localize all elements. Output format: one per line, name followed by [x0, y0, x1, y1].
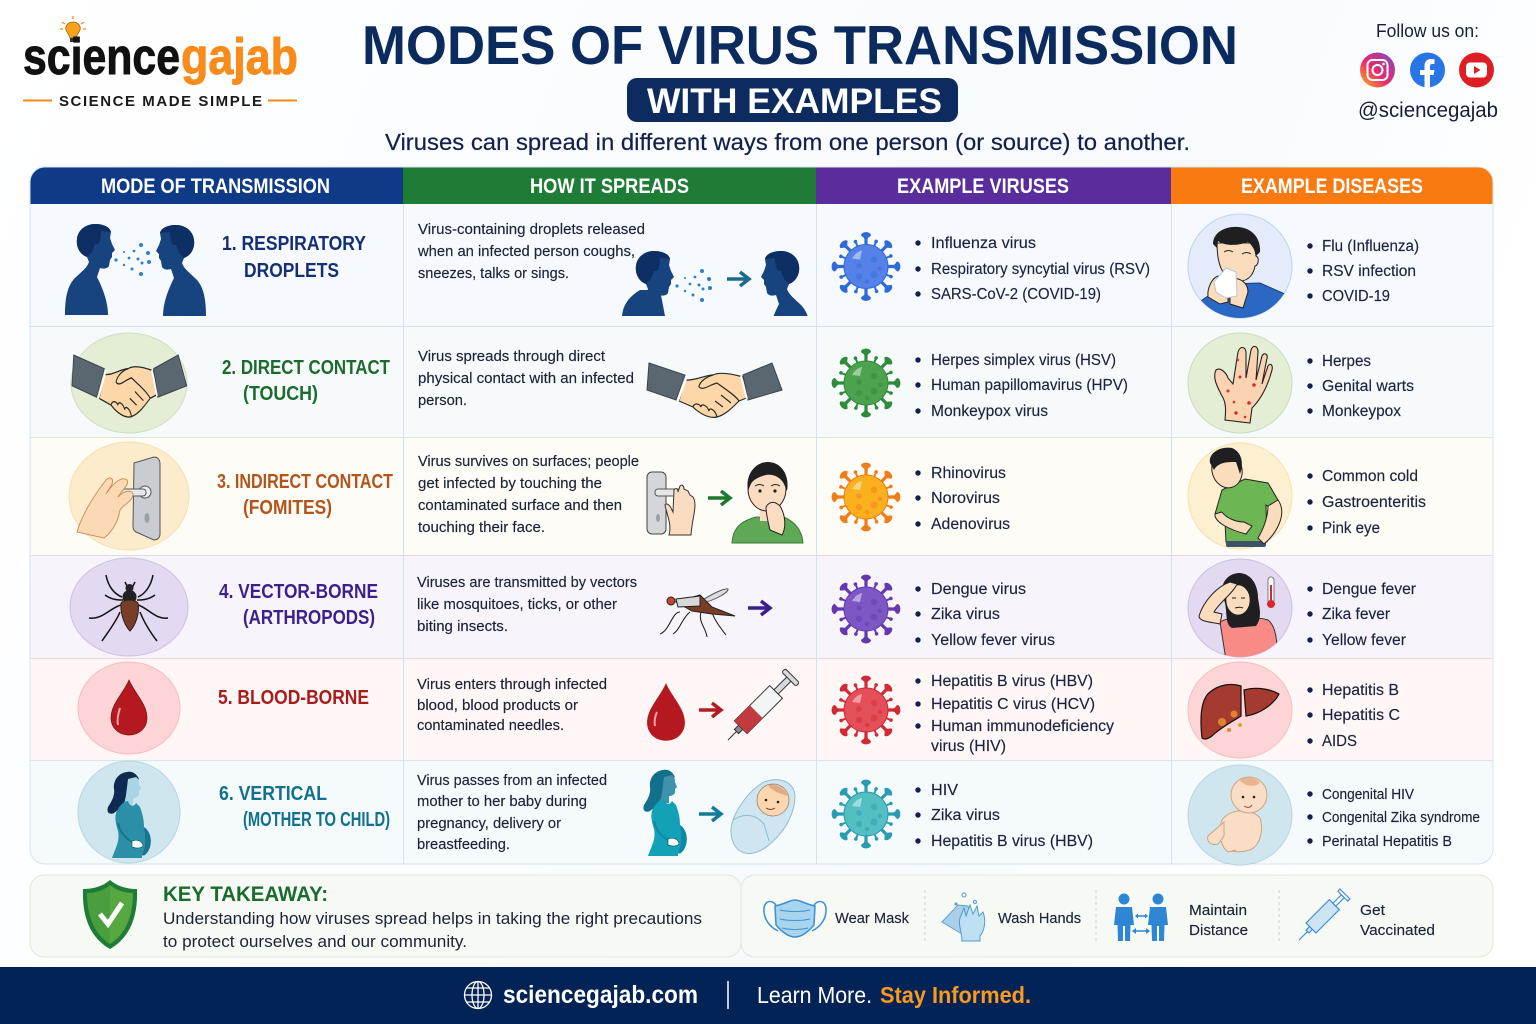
- list: blood-borne viruses: Hepatitis B virus (HBV): [931, 673, 1093, 690]
- label: vertical: 6. VERTICAL: [219, 783, 327, 805]
- list: blood-borne diseases: Hepatitis C: [1322, 707, 1400, 724]
- text: how droplets spread: sneezes, talks or sings.: [418, 266, 569, 282]
- heading: key takeaway: KEY TAKEAWAY:: [163, 883, 328, 906]
- text: how direct contact spreads: person.: [418, 393, 467, 409]
- list: fomite diseases: [1307, 468, 1426, 537]
- row 1: respiratory droplets: [64, 214, 1418, 318]
- subtitle pill: with examples: WITH EXAMPLES: [647, 82, 942, 121]
- column headers: [101, 175, 1423, 198]
- list: blood-borne viruses: virus (HIV): [931, 738, 1006, 755]
- icon: two people with droplets: [65, 224, 206, 316]
- icon: maintain distance: [1114, 894, 1168, 941]
- list: vertical diseases: Congenital HIV: [1322, 786, 1414, 803]
- list: vector viruses: Dengue virus: [931, 581, 1026, 598]
- row 2: direct contact: [71, 333, 1414, 433]
- social block: [1358, 21, 1498, 122]
- text: how blood spreads: Virus enters through infected: [417, 677, 607, 693]
- list: blood-borne diseases: [1307, 682, 1400, 750]
- icon: youtube: [1459, 52, 1494, 88]
- icon: facebook: [1410, 52, 1445, 88]
- list: vertical diseases: Perinatal Hepatitis B: [1322, 833, 1452, 850]
- footer bar: [0, 967, 1536, 1024]
- text: how blood spreads: contaminated needles.: [417, 718, 564, 734]
- icon: instagram: [1360, 52, 1395, 88]
- icon: vaccine syringe: [1294, 889, 1350, 945]
- label: vertical: (MOTHER TO CHILD): [243, 809, 390, 831]
- icon: handshake in circle: [71, 333, 187, 433]
- icon: green virus: [832, 349, 900, 417]
- icon: man sneezing: [1188, 214, 1292, 322]
- text: how vertical spread works: breastfeeding.: [417, 837, 510, 853]
- text: takeaway message: Understanding how viruses spread helps in taking the right precautions: [163, 909, 702, 928]
- label: vertical: [219, 783, 390, 831]
- text: how blood spreads: blood, blood products or: [417, 698, 578, 714]
- icon: teal virus: [832, 780, 900, 848]
- list: vector viruses: Zika virus: [931, 606, 1000, 623]
- icon: liver: [1188, 662, 1292, 758]
- list: direct contact viruses: Monkeypox virus: [931, 403, 1048, 420]
- icon: shield with check: [83, 880, 137, 949]
- label: indirect contact: (FOMITES): [243, 497, 332, 519]
- list: fomite viruses: [915, 465, 1010, 533]
- list: direct contact diseases: Genital warts: [1322, 378, 1414, 395]
- list: direct contact diseases: Herpes: [1322, 353, 1371, 370]
- text: how vertical spread works: pregnancy, delivery or: [417, 816, 561, 832]
- list: vertical viruses: [915, 782, 1093, 850]
- label: maintain distance: Maintain: [1189, 902, 1247, 919]
- list: respiratory diseases: RSV infection: [1322, 263, 1416, 280]
- icon: sick man holding stomach: [1188, 443, 1292, 549]
- icon: woman with fever and thermometer: [1188, 559, 1292, 660]
- label: wear mask: Wear Mask: [835, 910, 909, 927]
- logo: sciencegajab: SCIENCE MADE SIMPLE: [59, 93, 262, 110]
- icon: droplet spread diagram: [622, 251, 808, 316]
- text: how fomites spread: contaminated surface and then: [418, 498, 622, 514]
- label: indirect contact: [217, 471, 393, 519]
- tagline: Learn More.: [757, 982, 872, 1008]
- list: fomite viruses: Norovirus: [931, 490, 1000, 507]
- icon: red virus: [832, 676, 900, 744]
- list: fomite viruses: Rhinovirus: [931, 465, 1006, 482]
- list: vector diseases: [1307, 581, 1416, 649]
- list: direct contact viruses: Human papillomavirus (HPV): [931, 377, 1128, 394]
- list: respiratory viruses: [915, 235, 1150, 303]
- column headers: EXAMPLE VIRUSES: [897, 175, 1069, 198]
- icon: door handle, arrow and man touching face: [647, 462, 803, 543]
- column headers: MODE OF TRANSMISSION: [101, 175, 330, 198]
- website: sciencegajab.com: [503, 981, 698, 1009]
- icon: handshake: [647, 363, 782, 417]
- list: fomite diseases: Common cold: [1322, 468, 1418, 485]
- label: respiratory droplets: [222, 233, 367, 282]
- icon: light bulb: [60, 16, 86, 42]
- list: respiratory diseases: [1307, 238, 1419, 305]
- icon: globe: [464, 982, 492, 1008]
- text: how vertical spread works: [417, 773, 607, 853]
- panel: key takeaway: [30, 875, 741, 957]
- label: vector-borne: [219, 581, 378, 629]
- icon: blue virus: [832, 232, 900, 301]
- label: vector-borne: (ARTHROPODS): [243, 607, 375, 629]
- list: vertical viruses: HIV: [931, 782, 959, 799]
- label: get vaccinated: Vaccinated: [1360, 922, 1435, 939]
- text: how droplets spread: [417, 222, 645, 282]
- list: vector viruses: [915, 581, 1055, 649]
- text: how blood spreads: [417, 677, 607, 734]
- text: how vectors spread: [417, 575, 637, 635]
- text: how vectors spread: Viruses are transmitted by vectors: [417, 575, 637, 591]
- row 6: vertical: [78, 761, 1480, 865]
- icon: hand with rash: [1188, 333, 1292, 433]
- text: how direct contact spreads: Virus spreads through direct: [418, 349, 605, 365]
- text: how droplets spread: Virus-containing droplets released: [418, 222, 645, 238]
- label: maintain distance: Distance: [1189, 922, 1248, 939]
- list: vertical viruses: Zika virus: [931, 807, 1000, 824]
- row 4: vector-borne: [70, 558, 1416, 660]
- title: MODES OF VIRUS TRANSMISSION: [362, 14, 1238, 76]
- icon: washing hands: [942, 893, 985, 941]
- label: direct contact: 2. DIRECT CONTACT: [222, 357, 390, 379]
- list: vertical diseases: Congenital Zika syndrome: [1322, 809, 1480, 826]
- logo: sciencegajab: science: [23, 28, 180, 85]
- label: blood-borne: 5. BLOOD-BORNE: [218, 687, 369, 709]
- tagline: Stay Informed.: [880, 982, 1031, 1008]
- list: blood-borne viruses: [915, 673, 1114, 755]
- icon: orange virus: [832, 463, 900, 531]
- list: direct contact diseases: Monkeypox: [1322, 403, 1401, 420]
- label: get vaccinated: [1360, 902, 1435, 939]
- label: direct contact: [222, 357, 390, 405]
- list: vertical viruses: Hepatitis B virus (HBV): [931, 833, 1093, 850]
- text: how fomites spread: [418, 454, 639, 536]
- list: fomite diseases: Pink eye: [1322, 520, 1380, 537]
- list: vector viruses: Yellow fever virus: [931, 632, 1055, 649]
- icon: purple virus: [832, 575, 900, 643]
- label: get vaccinated: Get: [1360, 902, 1386, 919]
- text: how direct contact spreads: [418, 349, 634, 409]
- list: fomite diseases: Gastroenteritis: [1322, 494, 1426, 511]
- row 3: indirect contact: [69, 442, 1426, 550]
- intro sentence: Viruses can spread in different ways from one person (or source) to another.: [385, 129, 1190, 155]
- list: vector diseases: Zika fever: [1322, 606, 1390, 623]
- social block: Follow us on:: [1376, 21, 1479, 41]
- column headers: HOW IT SPREADS: [530, 175, 689, 198]
- list: direct contact viruses: Herpes simplex virus (HSV): [931, 352, 1116, 369]
- icon: blood drop in circle: [78, 662, 180, 754]
- text: how direct contact spreads: physical contact with an infected: [418, 371, 634, 387]
- text: how droplets spread: when an infected person coughs,: [417, 244, 635, 260]
- list: fomite viruses: Adenovirus: [931, 516, 1010, 533]
- list: blood-borne viruses: Hepatitis C virus (HCV): [931, 696, 1095, 713]
- list: blood-borne diseases: AIDS: [1322, 733, 1357, 750]
- list: vector diseases: Dengue fever: [1322, 581, 1416, 598]
- text: how fomites spread: Virus survives on surfaces; people: [418, 454, 639, 470]
- text: how vertical spread works: Virus passes from an infected: [417, 773, 607, 789]
- list: direct contact diseases: [1307, 353, 1414, 420]
- column headers: EXAMPLE DISEASES: [1241, 175, 1423, 198]
- icon: hand on door handle: [69, 442, 189, 550]
- label: vector-borne: 4. VECTOR-BORNE: [219, 581, 378, 603]
- label: direct contact: (TOUCH): [243, 383, 318, 405]
- list: respiratory diseases: COVID-19: [1322, 288, 1390, 305]
- text: takeaway message: [163, 909, 702, 951]
- icon: mosquito top view: [70, 558, 188, 656]
- icon: mother, arrow and swaddled baby: [643, 770, 795, 856]
- list: respiratory viruses: SARS-CoV-2 (COVID-19): [931, 286, 1101, 303]
- list: respiratory viruses: Respiratory syncytial virus (RSV): [931, 261, 1150, 278]
- label: maintain distance: [1189, 902, 1248, 939]
- panel: transmission table: [30, 167, 1493, 865]
- logo: sciencegajab: gajab: [181, 28, 298, 85]
- icon: mosquito side view with arrow: [660, 589, 770, 637]
- list: vector diseases: Yellow fever: [1322, 632, 1406, 649]
- text: how vectors spread: like mosquitoes, ticks, or other: [417, 597, 617, 613]
- list: respiratory diseases: Flu (Influenza): [1322, 238, 1419, 255]
- label: indirect contact: 3. INDIRECT CONTACT: [217, 471, 393, 493]
- text: how vectors spread: biting insects.: [417, 619, 508, 635]
- table backgrounds and grid: [30, 167, 1493, 864]
- label: respiratory droplets: 1. RESPIRATORY: [222, 233, 367, 255]
- list: blood-borne diseases: Hepatitis B: [1322, 682, 1399, 699]
- list: vertical diseases: [1307, 786, 1480, 850]
- panel: precautions: [741, 875, 1493, 957]
- text: how fomites spread: get infected by touching the: [418, 476, 602, 492]
- icon: baby: [1188, 765, 1292, 865]
- list: direct contact viruses: [915, 352, 1128, 420]
- text: how fomites spread: touching their face.: [418, 520, 545, 536]
- social block: @sciencegajab: [1358, 99, 1498, 122]
- icon: blood drop, arrow and syringe: [647, 669, 799, 747]
- icon: face mask: [764, 900, 826, 937]
- tagline: [757, 982, 1031, 1008]
- text: how vertical spread works: mother to her baby during: [417, 794, 587, 810]
- label: respiratory droplets: DROPLETS: [244, 260, 339, 282]
- icon: pregnant woman in circle: [78, 761, 180, 863]
- logo: sciencegajab: [23, 16, 298, 110]
- list: blood-borne viruses: Human immunodeficiency: [931, 718, 1114, 735]
- row 5: blood-borne: [78, 662, 1400, 758]
- label: wash hands: Wash Hands: [998, 910, 1081, 927]
- list: respiratory viruses: Influenza virus: [931, 235, 1036, 252]
- text: takeaway message: to protect ourselves and our community.: [163, 932, 467, 951]
